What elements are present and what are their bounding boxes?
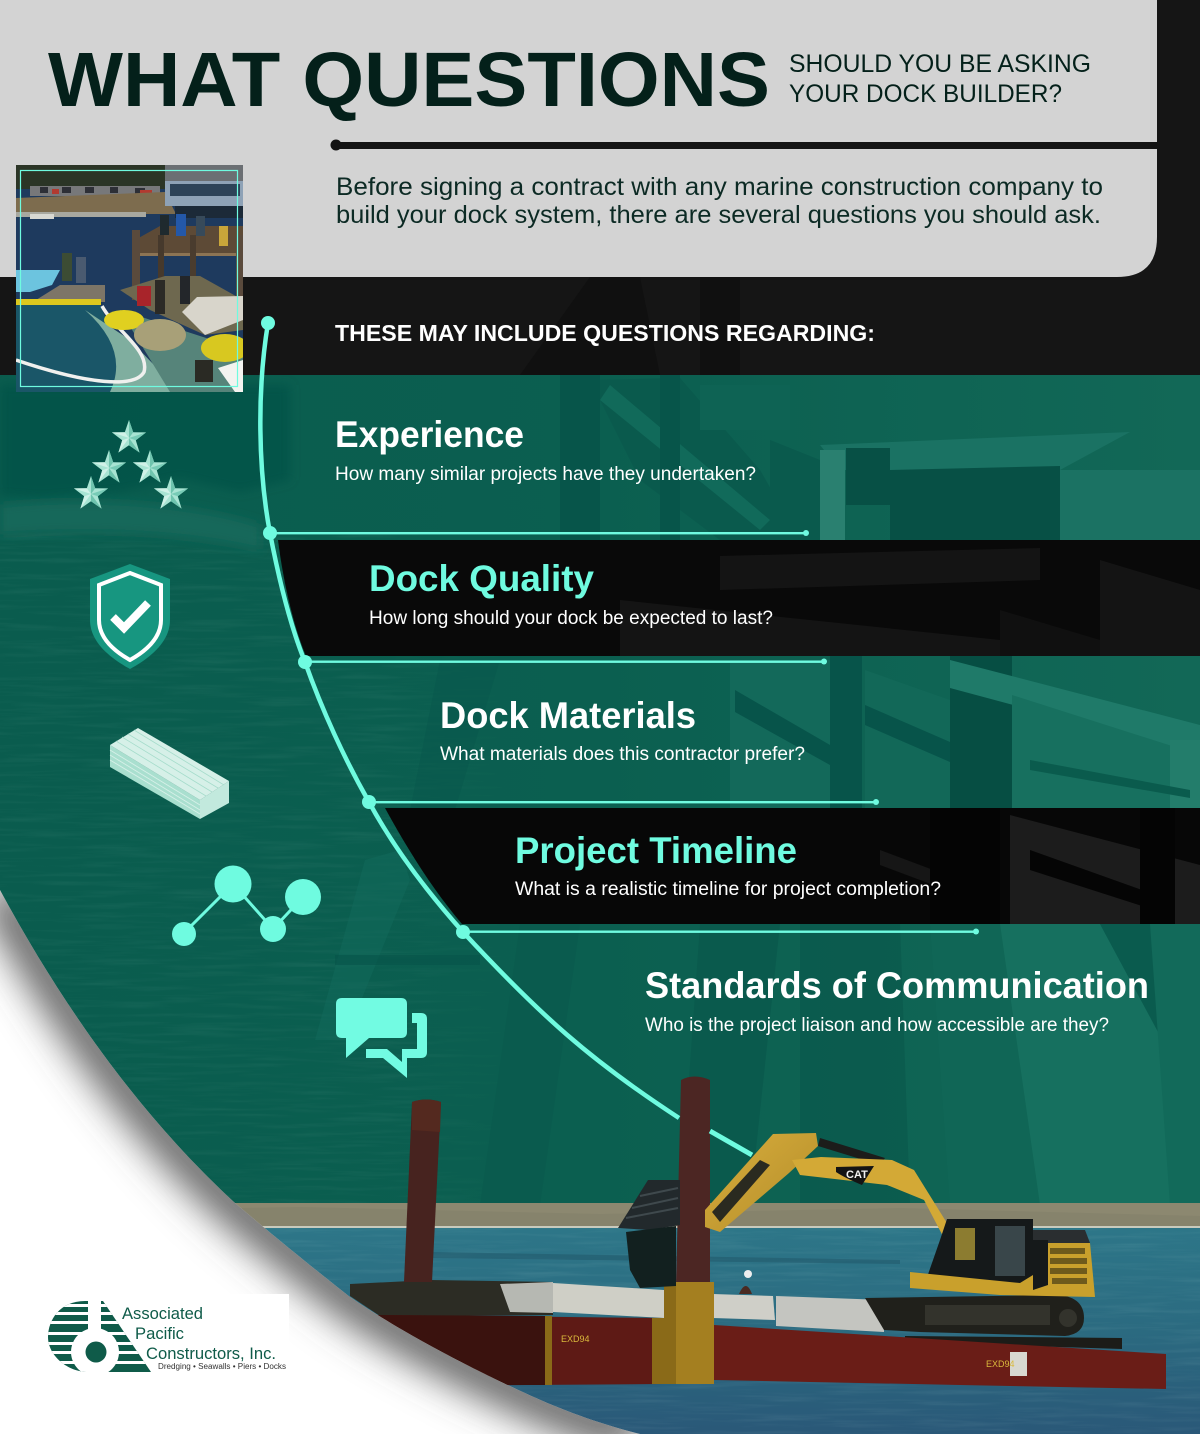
text block: Project Timeline: Project Timeline	[515, 830, 797, 871]
icon: shield with check	[90, 564, 170, 669]
text block: Project Timeline	[515, 830, 941, 900]
parked cars	[30, 186, 160, 196]
panel: dark band behind Project Timeline	[385, 808, 1200, 924]
white oil boom	[16, 306, 145, 382]
subtitle: YOUR DOCK BUILDER?	[789, 80, 1062, 108]
hull markings	[1010, 1352, 1027, 1376]
panel: dark band behind Dock Quality	[278, 540, 1200, 656]
yellow spud box	[664, 1282, 714, 1384]
intro text	[336, 173, 1103, 229]
excavator cab	[925, 1219, 1033, 1283]
sea	[0, 1228, 1200, 1434]
text block: Experience: How many similar projects have they undertaken?	[335, 464, 756, 485]
text block: Dock Quality: Dock Quality	[369, 558, 594, 599]
worker	[739, 1286, 752, 1294]
panel: white page-curl corner	[0, 890, 640, 1434]
icon: stack of lumber	[110, 728, 229, 819]
photo frame	[20, 170, 238, 386]
logo: Associated Pacific Constructors: Constructors, Inc.	[146, 1345, 276, 1363]
photo: divers and crew at marina dock	[16, 165, 249, 392]
text block: Dock Materials: Dock Materials	[440, 695, 696, 736]
boat left	[16, 270, 60, 292]
text block: Dock Materials	[440, 695, 805, 765]
logo mark	[48, 1301, 151, 1372]
panel: bottom photo of barge and excavator: EXD94	[561, 1334, 590, 1344]
header rule	[330, 140, 1157, 150]
yellow boom	[16, 299, 101, 305]
text block: Project Timeline: What is a realistic timeline for project completion?	[515, 879, 941, 900]
section heading: THESE MAY INCLUDE QUESTIONS REGARDING:	[335, 320, 875, 346]
floating platform	[36, 285, 105, 302]
subtitle: SHOULD YOU BE ASKING	[789, 50, 1091, 78]
panel: light grey header	[0, 0, 1157, 277]
ghosted dock structure	[315, 375, 1200, 1205]
panel: teal background with ghosted dock photo	[0, 375, 1200, 1210]
title: WHAT QUESTIONS	[48, 37, 770, 123]
intro text: build your dock system, there are several questions you should ask.	[336, 201, 1101, 229]
rock bank	[16, 192, 176, 214]
panel: bottom photo of barge and excavator: EXD94	[986, 1359, 1015, 1369]
pier deck	[140, 226, 243, 253]
text block: Dock Materials: What materials does this contractor prefer?	[440, 744, 805, 765]
panel: ghosted structure in dark header strip	[520, 277, 740, 375]
text block: Experience	[335, 414, 756, 485]
barge debris and concrete	[350, 1280, 553, 1316]
text block: Standards of Communication: Standards of Communication	[645, 965, 1149, 1006]
text block: Standards of Communication: Who is the project liaison and how accessible are they?	[645, 1015, 1109, 1036]
pontoon bags	[104, 310, 144, 330]
text block: Dock Quality: How long should your dock be expected to last?	[369, 608, 773, 629]
crew on pier	[160, 215, 169, 235]
lower water	[16, 305, 116, 392]
logo: Associated Pacific Constructors: Dredging • Seawalls • Piers • Docks	[158, 1362, 286, 1371]
subtitle	[789, 50, 1091, 108]
logo: Associated Pacific Constructors: Pacific	[135, 1325, 184, 1343]
curve: timeline arc	[260, 316, 752, 1155]
spud pile left	[404, 1100, 441, 1282]
divider line: Dock Quality	[305, 658, 827, 664]
text block: Experience: Experience	[335, 414, 524, 455]
panel: bottom photo of barge and excavator: CAT	[846, 1169, 868, 1181]
text block: Dock Quality	[369, 558, 773, 629]
work barge	[120, 276, 243, 335]
icon: five stars	[74, 420, 188, 509]
logo text: Associated	[122, 1305, 203, 1323]
excavator stick	[705, 1133, 818, 1232]
logo: Associated Pacific Constructors	[48, 1301, 286, 1372]
divider line: Experience	[270, 530, 809, 536]
spud pile right	[676, 1076, 710, 1284]
icon: connected dots chart	[172, 866, 321, 946]
excavator engine body	[910, 1240, 1095, 1297]
panel: bottom photo of barge and excavator	[0, 1076, 1200, 1434]
bucket with teeth	[618, 1180, 680, 1230]
intro text: Before signing a contract with any marine construction company to	[336, 173, 1103, 201]
icon: chat bubbles	[336, 998, 427, 1078]
divider line: Project Timeline	[463, 928, 979, 934]
barge hull	[377, 1315, 664, 1386]
palms and shoreline	[0, 385, 290, 550]
excavator tracks	[865, 1295, 1084, 1336]
divider line: Dock Materials	[369, 799, 879, 805]
text block: Standards of Communication	[645, 965, 1149, 1036]
falling dirt	[626, 1226, 676, 1288]
excavator boom	[792, 1157, 955, 1242]
cliff shoreline	[0, 1203, 1200, 1229]
